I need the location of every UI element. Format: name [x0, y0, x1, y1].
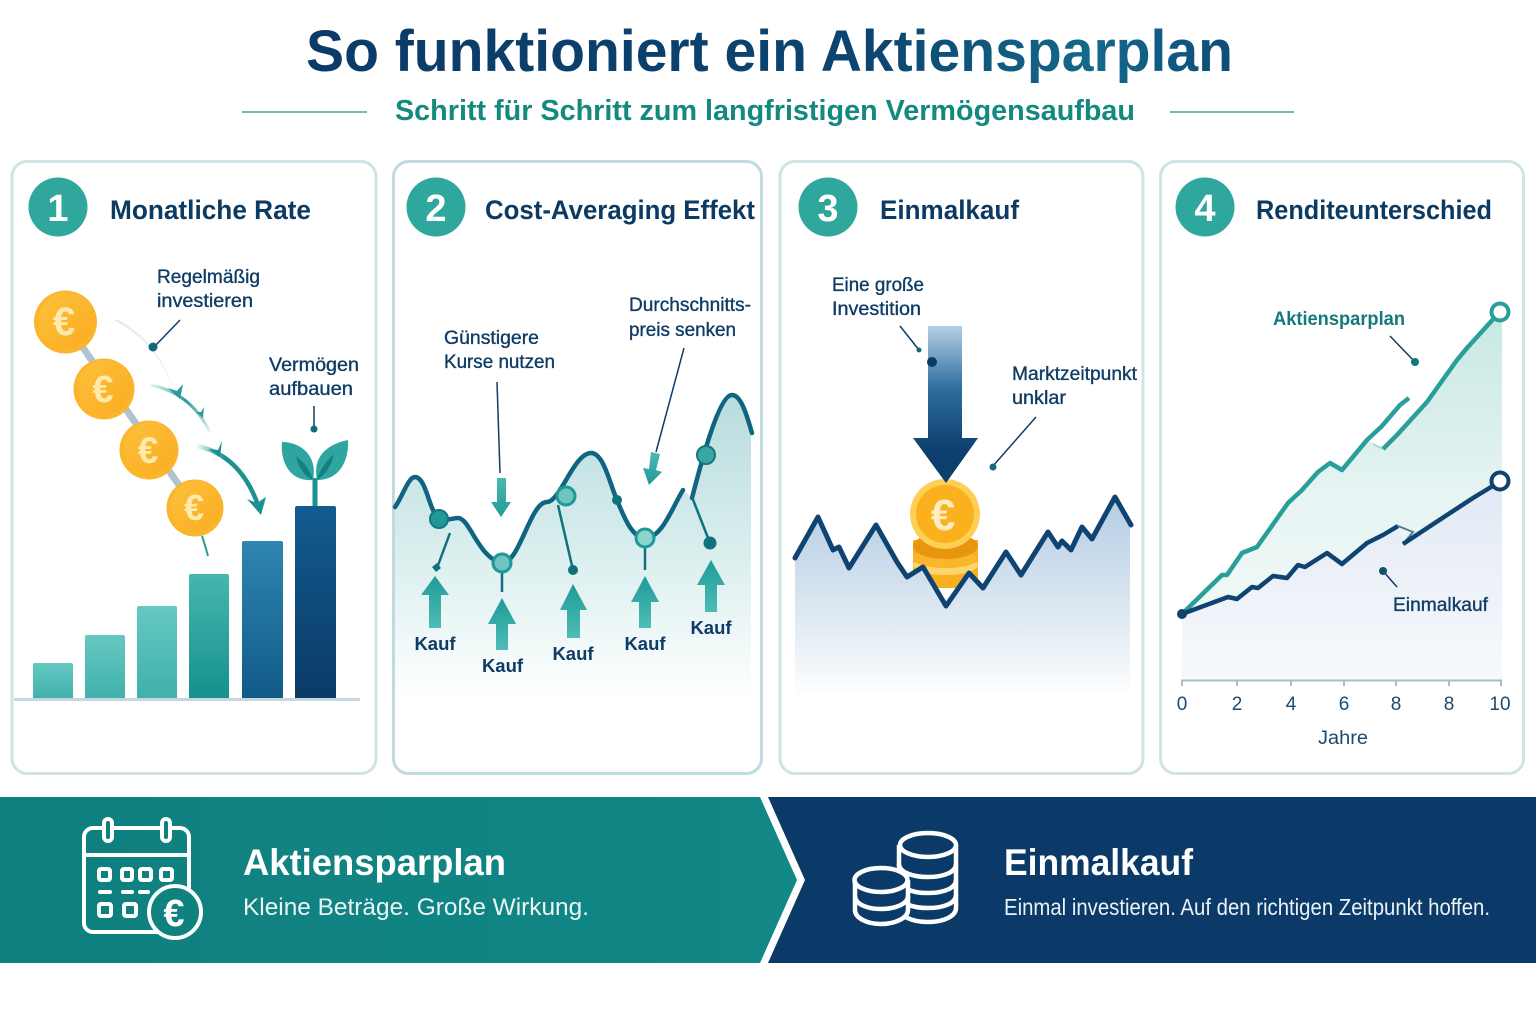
heading: Cost-Averaging Effekt: Cost-Averaging Effekt: [485, 195, 755, 225]
panel: Monatliche Rate: [12, 162, 376, 774]
icon: sprout on top bar: [282, 440, 348, 506]
heading: Einmalkauf: Einmalkauf: [880, 195, 1020, 225]
callout: Marktzeitpunkt unklar: [990, 364, 1138, 470]
callout: Vermögen aufbauen: aufbauen: [269, 379, 353, 400]
icon: stacks of coins: [854, 833, 956, 924]
x axis: years: [1177, 680, 1511, 749]
callout: Günstigere Kurse nutzen: [444, 328, 555, 517]
callout: Aktiensparplan: Aktiensparplan: [1273, 309, 1405, 330]
icon: falling euro coins: €: [138, 430, 158, 471]
buy arrow 4: Kauf: [624, 633, 666, 654]
x axis: years: 2: [1232, 694, 1242, 715]
x axis: years: Jahre: [1318, 728, 1368, 749]
callout: Einmalkauf: [1379, 567, 1489, 616]
callout: Vermögen aufbauen: Vermögen: [269, 355, 359, 376]
icon: falling euro coins: €: [92, 369, 114, 411]
step badge 4: [1176, 178, 1234, 236]
x axis: years: 0: [1177, 694, 1187, 715]
callout: Marktzeitpunkt unklar: unklar: [1012, 388, 1067, 409]
buy arrow 5: Kauf: [690, 617, 732, 638]
step badge 1: [28, 178, 88, 236]
icon: falling euro coins: [34, 290, 224, 536]
x axis: years: 6: [1339, 694, 1349, 715]
callout: Vermögen aufbauen: [269, 355, 359, 432]
arrow: one large investment: [913, 326, 978, 483]
callout: Regelmäßig investieren: Regelmäßig: [157, 267, 260, 288]
arrows: coins flowing into bars: [116, 320, 266, 556]
callout: Regelmäßig investieren: [148, 267, 260, 352]
step badge 4: 4: [1194, 188, 1216, 230]
banner: Einmalkauf: [768, 797, 1536, 963]
area chart: fluctuating price line: [395, 395, 752, 700]
callout: Einmalkauf: Einmalkauf: [1393, 595, 1489, 616]
buy arrow 5: [690, 560, 732, 638]
step badge 1: 1: [47, 188, 69, 230]
buy arrow 1: Kauf: [414, 633, 456, 654]
icon: falling euro coins: €: [53, 300, 75, 344]
bar chart: growing wealth: [14, 506, 360, 700]
line chart: return comparison: [1177, 304, 1508, 680]
callout: Günstigere Kurse nutzen: Kurse nutzen: [444, 352, 555, 373]
callout: Eine große Investition: [832, 275, 937, 367]
buy arrow 3: Kauf: [552, 643, 594, 664]
x axis: years: 8: [1444, 694, 1454, 715]
buy point markers and connectors: [430, 446, 716, 592]
banner: Aktiensparplan: [0, 797, 797, 963]
panel: Cost-Averaging Effekt: [394, 162, 762, 774]
heading: Monatliche Rate: Monatliche Rate: [110, 195, 311, 225]
step badge 2: 2: [425, 188, 447, 230]
step badge 3: 3: [817, 188, 839, 230]
callout: Durchschnittspreis senken: preis senken: [629, 320, 736, 341]
icon: calendar with euro: €: [163, 893, 185, 935]
x axis: years: 10: [1489, 694, 1511, 715]
buy arrow 3: [552, 584, 594, 664]
heading: Renditeunterschied: Renditeunterschied: [1256, 195, 1492, 225]
callout: Durchschnittspreis senken: Durchschnitts-: [629, 295, 751, 316]
banner heading: Einmalkauf: [1004, 842, 1194, 883]
x axis: years: 8: [1391, 694, 1401, 715]
subtitle: Schritt für Schritt zum langfristigen Vermögensaufbau: [395, 95, 1135, 127]
area chart: volatile market: [795, 497, 1131, 700]
buy arrow 4: [624, 576, 666, 654]
callout: Eine große Investition: Investition: [832, 299, 921, 320]
buy arrow 2: [482, 598, 524, 676]
title: So funktioniert ein Aktiensparplan: [306, 19, 1233, 84]
buy arrow 1: [414, 576, 456, 654]
icon: coin stack: €: [931, 491, 955, 540]
callout: Günstigere Kurse nutzen: Günstigere: [444, 328, 539, 349]
buy arrow 2: Kauf: [482, 655, 524, 676]
icon: calendar with euro: [84, 819, 201, 938]
step badge 3: [798, 178, 858, 236]
callout: Durchschnittspreis senken: [629, 295, 751, 485]
callout: Regelmäßig investieren: investieren: [157, 291, 253, 312]
banner heading: Aktiensparplan: [243, 842, 506, 883]
callout: Eine große Investition: Eine große: [832, 275, 924, 296]
x axis: years: 4: [1286, 694, 1297, 715]
banner text: Kleine Beträge. Große Wirkung.: [243, 894, 589, 921]
panel: Renditeunterschied: [1160, 162, 1524, 774]
callout: Marktzeitpunkt unklar: Marktzeitpunkt: [1012, 364, 1138, 385]
icon: coin stack: [910, 479, 980, 588]
step badge 2: [406, 178, 466, 236]
panel: Einmalkauf: [780, 162, 1143, 774]
callout: Aktiensparplan: [1273, 309, 1419, 366]
icon: falling euro coins: €: [184, 487, 204, 528]
